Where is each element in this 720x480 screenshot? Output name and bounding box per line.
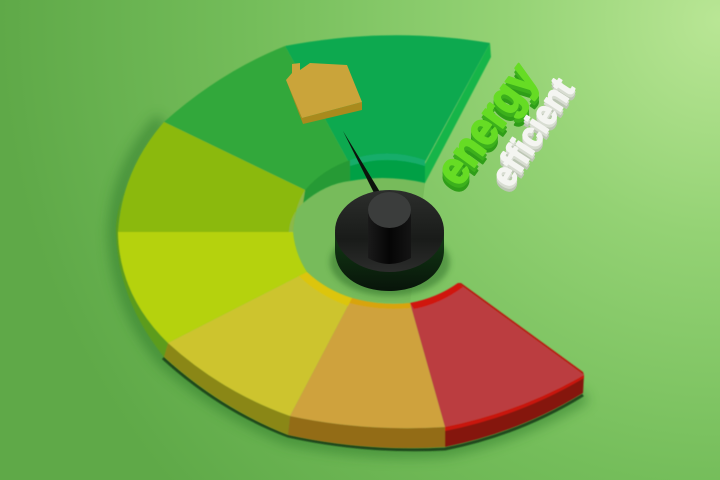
label: efficient: efficient	[482, 73, 582, 196]
inner wall: mid green	[303, 160, 350, 203]
segment: dark green	[285, 35, 490, 162]
gauge dial	[116, 35, 584, 448]
knob top face	[335, 190, 444, 272]
outer side wall: yellow	[164, 343, 290, 435]
post top	[368, 192, 411, 228]
knob base	[335, 232, 444, 291]
black dial knob	[335, 190, 444, 291]
house side	[286, 80, 362, 124]
segment: yellow	[168, 272, 352, 416]
outer side wall: lime	[116, 190, 168, 357]
segment: orange	[290, 298, 445, 428]
label: efficient: efficient	[482, 70, 582, 193]
segment: yellow green	[118, 232, 307, 343]
right edge wall	[425, 43, 491, 183]
house top	[286, 63, 362, 118]
gauge contact shadow	[163, 358, 583, 450]
knob shadow	[330, 228, 450, 296]
inner wall: lime	[289, 190, 305, 232]
knob post	[368, 210, 411, 264]
label: efficient: efficient	[482, 76, 582, 199]
inner floor shade	[292, 177, 425, 304]
needle	[343, 131, 380, 195]
label: energy: energy	[424, 61, 547, 202]
segment: red	[410, 283, 584, 427]
inner wall: dark green	[350, 154, 425, 183]
house icon	[286, 63, 362, 124]
label: energy: energy	[424, 57, 547, 198]
inner wall top lip	[350, 154, 425, 166]
segment: mid green	[164, 46, 348, 190]
outer side wall: red	[445, 375, 584, 447]
segment: lime green	[118, 122, 305, 232]
label: energy: energy	[424, 53, 547, 194]
outer side wall: orange	[288, 416, 445, 448]
bevel highlights	[445, 375, 584, 431]
gauge soft shadow	[116, 120, 585, 450]
